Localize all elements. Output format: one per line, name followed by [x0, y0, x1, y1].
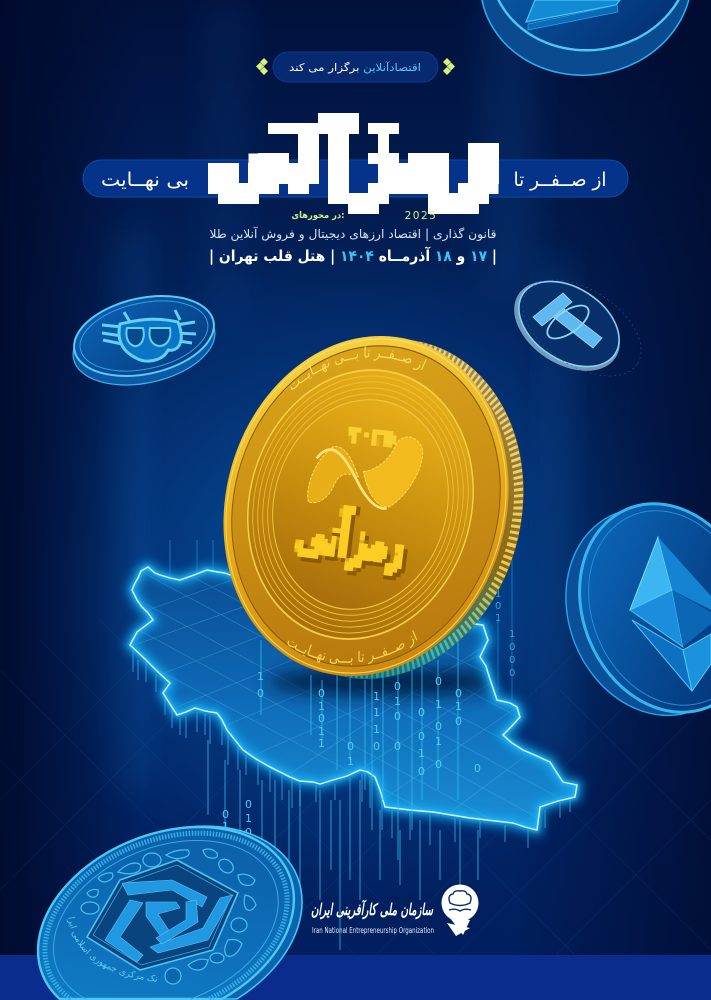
organizer english name: Iran National Entrepreneurship Organization: [312, 926, 434, 935]
binary rain behind map: 1000: [509, 629, 515, 679]
bank inscription: بانک مرکزی جمهوری اسلامی ایران: [66, 917, 157, 982]
main title: ا: [329, 118, 353, 217]
logo emblem: [442, 884, 478, 936]
main title: ــ: [369, 87, 393, 145]
curved slogan top: از صــفــر تا بـــی نهــایــت: [290, 346, 427, 390]
hexagon emblem: [87, 860, 238, 970]
top organizer pill: [256, 52, 455, 82]
map grid: [134, 572, 560, 818]
coin face: [223, 336, 508, 676]
binary rain behind map: [170, 540, 515, 700]
binary rain over map: 01011: [318, 687, 325, 750]
organizer logo: [311, 884, 478, 936]
organizer persian name: سازمان ملی کارآفرینی ایران: [311, 899, 433, 920]
binary rain over map: 010: [455, 687, 462, 728]
date and venue line: | ۱۷ و ۱۸ آذرمــاه ۱۴۰۴ | هتل قلب تهران |: [209, 247, 497, 266]
binary rain over map: 0100: [394, 680, 401, 753]
map glow outline: [130, 567, 577, 830]
map of Iran: [120, 560, 600, 848]
slogan pill: [83, 160, 628, 197]
icon: right diamonds: [443, 58, 455, 75]
binary rain over map: 0010: [418, 706, 425, 778]
coin: tether: [498, 260, 658, 396]
coin: top ethereum: [468, 0, 704, 89]
slogan left: بی نهــایت: [101, 169, 189, 191]
icon: bitcoin symbol: [102, 310, 196, 361]
binary rain over map: 010: [222, 808, 229, 845]
icon: tether symbol: [533, 293, 602, 348]
binary rain over map: 1110: [373, 690, 380, 753]
main title: مز: [348, 95, 452, 210]
topics line: قانون گذاری | اقتصاد ارزهای دیجیتال و فروش آنلاین طلا: [210, 226, 496, 242]
year: 2025: [405, 210, 437, 222]
main title: [208, 77, 500, 217]
binary rain behind map: 0101: [495, 577, 501, 624]
coin title: [293, 500, 413, 580]
main title: تی: [208, 99, 320, 206]
coin title: رمزآتی: [293, 500, 410, 575]
map surface: [130, 567, 577, 830]
coin: bitcoin: [65, 284, 223, 397]
main gold coin: [223, 336, 524, 679]
icon: left diamonds: [256, 58, 268, 75]
coin: ethereum right: [536, 477, 711, 742]
binary rain over map: [208, 640, 481, 950]
top organizer pill: اقتصادآنلاین برگزار می کند: [289, 61, 421, 74]
binary rain over map: 0: [474, 762, 481, 775]
coin wave logo: [308, 437, 423, 508]
coin shadow on map: [267, 668, 503, 696]
bottom band: [0, 955, 711, 1000]
main title: ـــ: [272, 87, 314, 145]
coin year: ۲۰۲۵: [348, 422, 396, 451]
icon: ethereum diamond: [630, 537, 711, 691]
floor grid: [0, 610, 711, 998]
main title: ـــ: [321, 81, 357, 139]
coin title: رمزآتی: [296, 504, 413, 580]
coin ridged edge: [201, 307, 561, 711]
main title: ر: [435, 77, 500, 211]
binary rain over map: 01010: [435, 675, 442, 771]
binary rain over map: 10: [257, 670, 264, 700]
binary rain over map: 01: [347, 740, 354, 768]
topics intro: در محورهای:: [292, 211, 344, 221]
curved slogan bottom: از صــفــر تا بـــی نهــایــت: [288, 630, 418, 665]
binary rain over map: 010: [245, 798, 252, 839]
map extrusion drips: [133, 650, 570, 848]
coin: central bank: [36, 825, 303, 1000]
slogan right: از صــفــر تا: [514, 169, 606, 191]
ornaments: [81, 849, 256, 984]
